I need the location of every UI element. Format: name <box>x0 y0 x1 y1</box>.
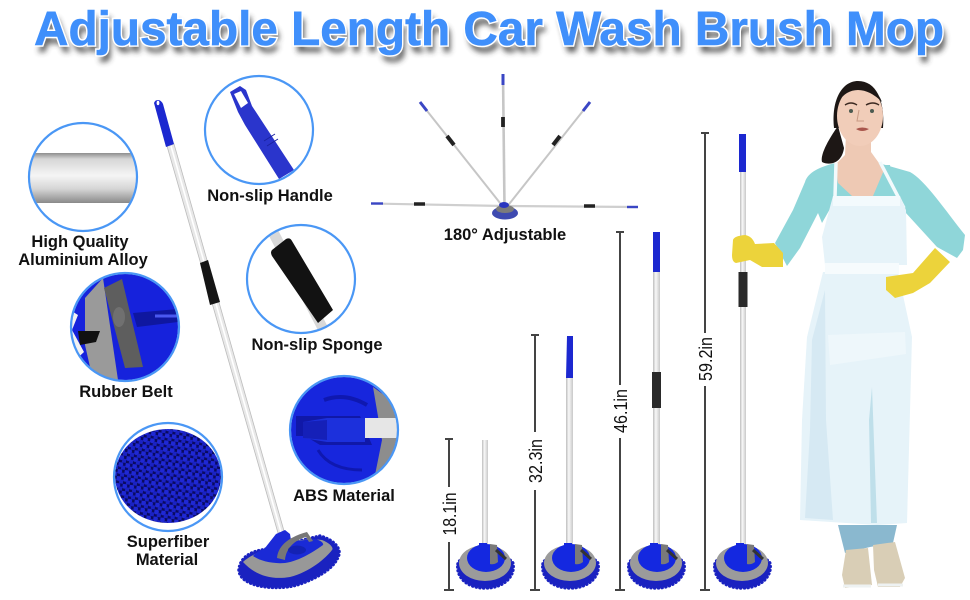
callout: aluminium alloy <box>18 123 149 269</box>
apron straps <box>835 162 904 208</box>
pole: 32.3in <box>543 336 598 588</box>
callout: ABS material: ABS Material <box>293 487 395 505</box>
callout: aluminium alloy: Aluminium Alloy <box>18 251 149 269</box>
callout: non-slip sponge <box>247 225 383 354</box>
shirt sleeve: left <box>775 163 835 266</box>
ruler: 18.1in: 18.1in <box>440 492 460 536</box>
callout: superfiber material <box>114 423 222 569</box>
ruler: 18.1in <box>440 439 460 590</box>
gloves <box>732 235 783 267</box>
callout: non-slip handle: Non-slip Handle <box>207 187 333 205</box>
180 degree fan diagram: 180° Adjustable <box>444 226 566 244</box>
apron skirt <box>800 272 912 525</box>
pole: 59.2in <box>715 134 770 588</box>
callout: superfiber material: Material <box>136 551 198 569</box>
apron waist tie <box>825 263 899 274</box>
title: Adjustable Length Car Wash Brush Mop <box>34 3 944 56</box>
hair <box>834 81 883 128</box>
jeans <box>838 525 897 553</box>
shoes <box>842 548 872 588</box>
neck and chest <box>835 135 884 196</box>
callout: non-slip handle <box>205 76 333 205</box>
apron pocket <box>828 332 906 365</box>
ruler: 46.1in: 46.1in <box>611 389 631 433</box>
callout: ABS material <box>290 376 398 505</box>
title: Adjustable Length Car Wash Brush Mop <box>34 3 944 56</box>
apron bib <box>822 196 907 265</box>
ruler: 46.1in <box>611 232 631 590</box>
shirt torso <box>833 165 897 198</box>
pole: 18.1in <box>458 440 513 588</box>
ruler: 59.2in <box>696 133 716 590</box>
180 degree fan diagram <box>371 74 638 244</box>
callout: aluminium alloy: High Quality <box>31 233 129 251</box>
callout: superfiber material: Superfiber <box>127 533 210 551</box>
ponytail <box>822 126 844 164</box>
ruler: 32.3in <box>526 335 546 590</box>
title: Adjustable Length Car Wash Brush Mop <box>37 10 947 63</box>
main mop with long handle <box>154 100 339 587</box>
callout: non-slip sponge: Non-slip Sponge <box>251 336 383 354</box>
ruler: 59.2in: 59.2in <box>696 337 716 381</box>
mop head <box>239 530 339 587</box>
face <box>837 86 883 146</box>
ruler: 32.3in: 32.3in <box>526 439 546 483</box>
pole: 46.1in <box>629 232 684 588</box>
callout: rubber belt <box>70 272 180 401</box>
callout: rubber belt: Rubber Belt <box>79 383 173 401</box>
woman in apron holding mop <box>732 81 965 588</box>
shirt sleeve: right <box>882 164 965 258</box>
